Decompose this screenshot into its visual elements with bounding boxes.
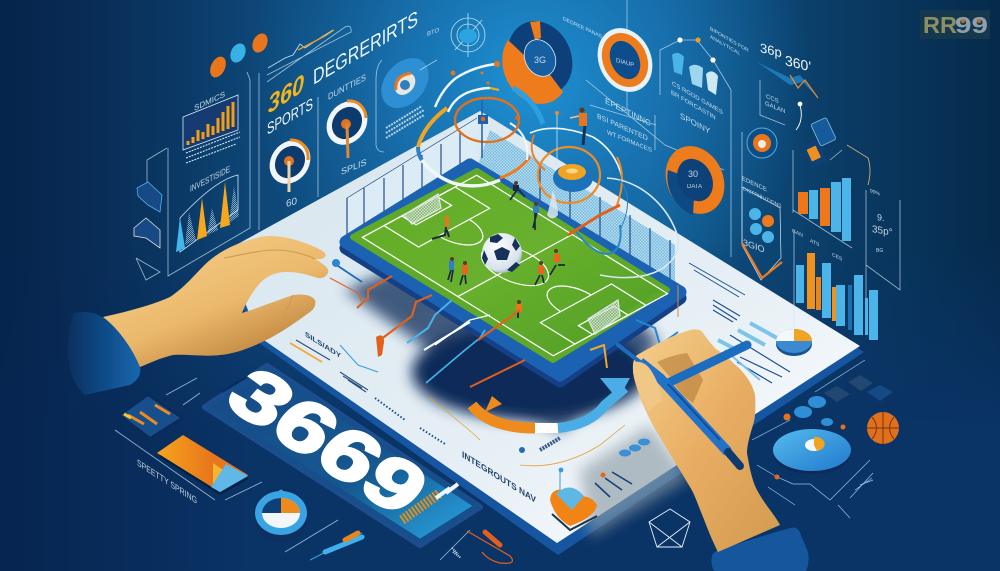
label text blocks: EDENCE — [742, 175, 767, 194]
label: outcomes: DUNTTIES — [328, 72, 366, 103]
icon: cards — [796, 102, 870, 185]
label: splits: SPLIS — [341, 157, 367, 177]
line chart: top — [268, 30, 334, 68]
hand: left — [68, 236, 328, 395]
phone — [205, 353, 480, 545]
label: investigate: INVESTISIDE — [190, 164, 230, 195]
icon: small card — [120, 395, 182, 438]
goal left — [404, 194, 441, 224]
title: 360: 360 — [268, 68, 305, 119]
label text blocks: BIPONTIES FOR — [710, 26, 749, 54]
target icon — [451, 13, 485, 57]
icon: heart tag — [550, 487, 597, 530]
label: right tiny: BTO — [427, 27, 439, 38]
tiny stat labels: ATS — [810, 238, 820, 248]
donut A — [496, 10, 584, 106]
ring cluster left — [418, 61, 543, 186]
watermark logo: 99 — [955, 12, 988, 38]
circle buttons — [742, 187, 782, 280]
pie on paper — [776, 329, 812, 356]
icon: polygon network — [649, 509, 690, 547]
circle buttons: 3GIO — [743, 237, 764, 255]
watermark logo — [920, 10, 990, 39]
label: small stats: SDMICS — [194, 89, 225, 113]
disc icon — [372, 49, 438, 117]
chart: triangle peaks — [176, 175, 239, 252]
gauge 1 — [261, 132, 319, 192]
paper notes: left: SILS/ADY — [305, 330, 341, 360]
finger gap — [657, 353, 703, 403]
title: 360 right: 360' — [785, 53, 811, 75]
tiny stat labels: GAN — [792, 228, 803, 239]
stat box: 360: 35p° — [872, 224, 893, 239]
icon: orange card — [157, 435, 248, 494]
donut C: DATA — [687, 184, 702, 190]
donut C: 30 — [688, 169, 698, 179]
stat box: 360 — [872, 212, 893, 254]
label text blocks: CS RGDD GAMES — [672, 80, 724, 117]
phone number: 3669 — [211, 353, 444, 530]
phone meter — [402, 484, 458, 520]
rotation arrow arc — [472, 378, 630, 428]
left faint connectors — [115, 378, 470, 560]
title: 360 right — [757, 40, 818, 98]
gauge 2 — [318, 93, 376, 158]
right dashboard panels — [496, 0, 900, 340]
right connectors — [752, 360, 873, 518]
tiny stat labels — [792, 188, 880, 263]
left sleeve — [68, 312, 140, 395]
tiny stat labels: 90% — [870, 188, 880, 198]
left dashboard panels — [134, 5, 485, 280]
players — [432, 181, 565, 318]
label text blocks: EPEPTINNC — [605, 95, 651, 128]
icon: marker tools — [310, 531, 512, 563]
paper sheet — [225, 111, 864, 555]
fence back right — [477, 130, 675, 292]
right hand shape — [633, 329, 780, 552]
goal right — [588, 300, 620, 334]
rings over pitch — [418, 61, 678, 278]
soccer ball — [482, 233, 522, 273]
stat box: 360: 9. — [877, 212, 884, 223]
label text blocks: BR FORCASTIN — [671, 89, 716, 122]
label text blocks: ANALYTICAL — [710, 34, 740, 57]
label text blocks — [563, 16, 785, 210]
pitch — [346, 118, 680, 381]
label text blocks: BSI PARENTED — [597, 111, 648, 143]
donut B: DIAUP — [616, 57, 634, 69]
donut C — [655, 136, 735, 224]
icon: side card 2 — [134, 218, 160, 248]
pitch lines — [362, 175, 668, 356]
stat box: 360: BG — [876, 248, 883, 254]
ring cluster right — [530, 128, 678, 278]
icon: hexagon cups — [672, 37, 718, 95]
thumb tip — [633, 362, 662, 412]
label: specialty spring: SPEETTY SPRING — [137, 458, 197, 507]
paper notes: integrations: INTEGROUTS NAV — [462, 450, 536, 506]
label text blocks: CCS — [766, 93, 779, 105]
referee figure — [555, 107, 587, 165]
title: 360 right: 36p — [760, 40, 782, 60]
pie disc — [773, 429, 851, 474]
bar chart: upper — [798, 178, 851, 241]
hand: right with pen — [618, 329, 809, 571]
bar chart: lower — [796, 253, 878, 340]
chart: small bar chart — [183, 95, 240, 163]
text block — [386, 106, 424, 138]
icon: stopwatch — [254, 488, 308, 542]
label text blocks: DISTRIBUTIONS — [743, 186, 782, 210]
icon: colored pills — [207, 31, 271, 80]
label text blocks: GALAN — [765, 100, 785, 115]
watermark logo: RR — [923, 12, 957, 38]
basketball — [867, 412, 899, 444]
small orange figure — [376, 335, 384, 357]
left hand shape — [103, 236, 328, 367]
title: sports: SPORTS — [267, 94, 313, 139]
pitch frame — [346, 171, 680, 381]
pen front — [618, 345, 640, 362]
toggle buttons — [784, 375, 893, 430]
pen back — [668, 345, 747, 383]
donut A: 3G — [534, 55, 546, 65]
label text blocks: SPOINY — [680, 111, 710, 136]
donut B — [587, 19, 663, 101]
icon: side card 1 — [137, 182, 162, 212]
tiny stat labels: CES — [832, 252, 843, 263]
label text blocks: DEGREE PANAS — [563, 16, 602, 40]
label text blocks: WT FORMACES — [607, 129, 652, 154]
label: 60: 60 — [286, 196, 297, 210]
wires under pitch — [330, 259, 678, 387]
goal net ring — [547, 190, 558, 218]
paper notes: left — [290, 330, 445, 444]
paper dotted connectors — [430, 398, 650, 497]
paper right text lines — [678, 263, 812, 383]
right sleeve — [711, 528, 809, 571]
pitch grass — [353, 171, 667, 360]
icon: small target — [747, 128, 777, 158]
fence back left — [347, 118, 477, 240]
